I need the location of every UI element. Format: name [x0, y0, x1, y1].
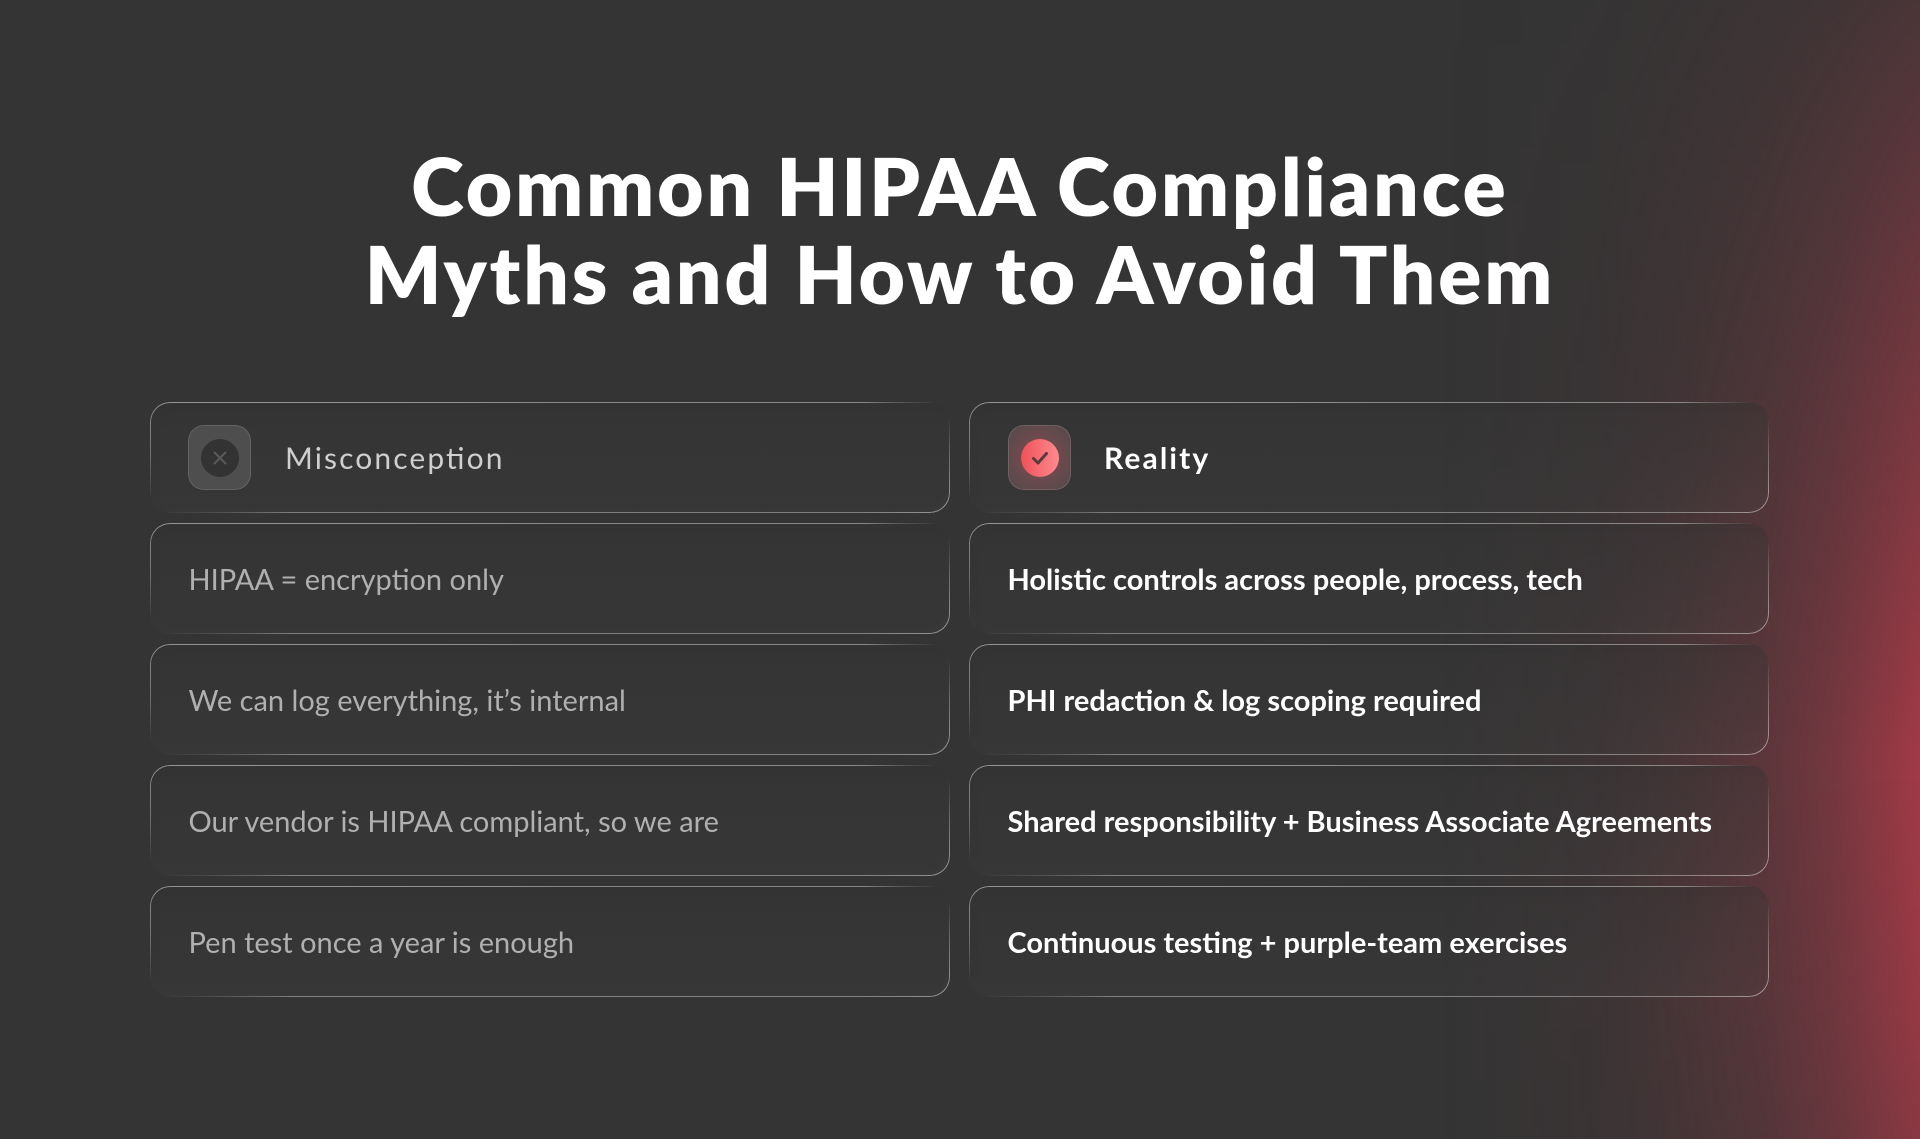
title: [365, 138, 1555, 322]
icon: check: [1008, 425, 1071, 490]
icon: cross: [188, 425, 251, 490]
reality row 2: PHI redaction & log scoping required: [1008, 682, 1481, 718]
reality row 1: Holistic controls across people, process, tech: [1008, 562, 1583, 596]
column heading: reality: Reality: [1104, 440, 1210, 476]
myth row 4: [150, 886, 950, 997]
myth row 3: Our vendor is HIPAA compliant, so we are: [188, 804, 719, 838]
reality row 2: [969, 644, 1769, 755]
title: Common HIPAA Compliance: [411, 138, 1509, 234]
reality row 4: Continuous testing + purple-team exercises: [1008, 924, 1567, 960]
title: Myths and How to Avoid Them: [365, 226, 1555, 322]
reality row 3: Shared responsibility + Business Associate Agreements: [1008, 804, 1712, 838]
myth row 3: [150, 765, 950, 876]
column heading: misconception: Misconception: [285, 440, 505, 476]
header card: misconception: [150, 402, 950, 513]
myth row 4: Pen test once a year is enough: [188, 924, 574, 960]
myth row 2: [150, 644, 950, 755]
myth row 1: [150, 523, 950, 634]
reality row 1: [969, 523, 1769, 634]
reality row 3: [969, 765, 1769, 876]
reality row 4: [969, 886, 1769, 997]
myth row 2: We can log everything, it’s internal: [188, 682, 626, 718]
header card: reality: [969, 402, 1769, 513]
myth row 1: HIPAA = encryption only: [188, 562, 504, 596]
background glow: [1592, 0, 1920, 1139]
